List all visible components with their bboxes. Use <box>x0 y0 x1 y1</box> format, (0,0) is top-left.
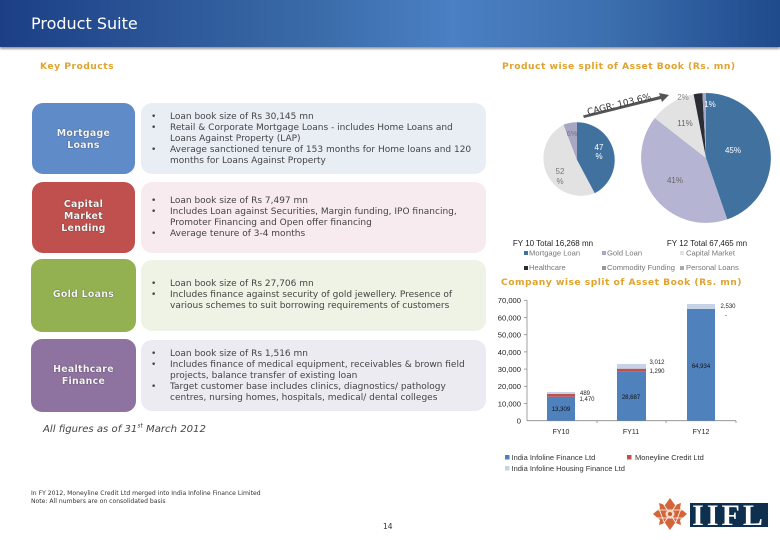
bars: FY11 <box>617 360 665 421</box>
pie: FY10: 52 <box>556 167 565 176</box>
pie legend: Gold Loan <box>607 248 642 258</box>
pie legend: Mortgage Loan <box>529 248 580 258</box>
details: healthcare: Includes finance of medical equipment, receivables & brown field <box>170 360 465 370</box>
y axis labels: 0 <box>517 416 521 426</box>
pie: FY10: 47 <box>595 143 604 152</box>
label box: gold <box>31 259 136 332</box>
panel: healthcare finance <box>31 339 486 412</box>
details: healthcare <box>141 340 486 411</box>
x axis labels: FY10 <box>553 429 569 436</box>
y axis labels: 60,000 <box>498 314 521 322</box>
y axis labels: 10,000 <box>498 400 521 408</box>
bars: FY12: - <box>725 313 727 319</box>
footnote: Note: All numbers are on consolidated basis <box>31 498 166 505</box>
caption: FY12 total: FY 12 Total 67,465 mn <box>667 239 747 248</box>
details: healthcare: projects, balance transfer of existing loan <box>170 371 357 381</box>
label box: capital market <box>32 182 135 253</box>
bars: FY12: 2,530 <box>720 304 736 310</box>
panel: gold loans <box>31 259 486 332</box>
heading: product wise split: Product wise split of Asset Book (Rs. mn) <box>502 61 736 72</box>
bar legend: Moneyline Credit Ltd <box>635 453 704 462</box>
pie legend: Healthcare <box>529 263 566 272</box>
details: mortgage: • <box>151 145 156 155</box>
details: healthcare: • <box>151 360 156 370</box>
bars: FY10 <box>547 391 595 421</box>
details: capital market: • <box>151 196 156 206</box>
bars: FY11: 3,012 <box>649 360 665 366</box>
pie legend: Capital Market <box>686 248 736 258</box>
panel: capital market lending <box>32 182 486 253</box>
label box: healthcare <box>31 339 136 412</box>
page number: 14 <box>383 522 393 531</box>
pie: FY12: 45% <box>725 146 741 155</box>
pie legend: Personal Loans <box>686 263 739 272</box>
pie: FY12: 41% <box>667 176 683 185</box>
pie: FY12: 2% <box>677 93 689 102</box>
bars: FY12: 64,934 <box>692 364 711 370</box>
bars: FY10: 489 <box>580 391 591 397</box>
bars: FY11: 1,290 <box>649 369 665 375</box>
details: gold: Includes finance against security of gold jewellery. Presence of <box>170 290 452 300</box>
pie legend: Commodity Funding <box>607 263 675 272</box>
pie: FY10: 6% <box>567 129 578 138</box>
bar legend: India Infoline Finance Ltd <box>512 453 595 462</box>
details: healthcare: Target customer base includes clinics, diagnostics/ pathology <box>170 382 446 392</box>
footnote <box>31 490 261 505</box>
label box: mortgage: Loans <box>67 140 100 151</box>
y axis labels: 40,000 <box>498 348 521 357</box>
details: gold <box>141 260 486 331</box>
label box: healthcare: Finance <box>62 376 105 387</box>
label box: mortgage <box>32 103 135 174</box>
y axis labels: 30,000 <box>498 365 521 374</box>
details: mortgage: • <box>151 123 156 133</box>
bars: FY10: 13,309 <box>552 407 571 413</box>
caption: FY10 total: FY 10 Total 16,268 mn <box>513 239 593 248</box>
details: mortgage <box>141 103 486 174</box>
label box: mortgage: Mortgage <box>57 128 110 139</box>
arrow: CAGR: CAGR: 103.6% <box>586 92 653 118</box>
x axis labels: FY12 <box>693 429 709 436</box>
header bar <box>0 0 780 47</box>
pie: FY12: 11% <box>677 119 693 128</box>
details: healthcare: • <box>151 349 156 359</box>
bars: FY10: 1,470 <box>579 397 595 403</box>
x axis labels <box>553 429 709 436</box>
details: gold: • <box>151 279 156 289</box>
label box: gold: Gold Loans <box>53 289 114 300</box>
note: as-of date: All figures as of 31st March 2012 <box>43 423 206 435</box>
details: healthcare: • <box>151 382 156 392</box>
footnote: In FY 2012, Moneyline Credit Ltd merged into India Infoline Finance Limited <box>31 490 261 497</box>
details: mortgage: months for Loans Against Property <box>170 156 326 166</box>
details: capital market: Loan book size of Rs 7,497 mn <box>170 196 308 206</box>
details: gold: • <box>151 290 156 300</box>
y axis labels: 50,000 <box>498 330 521 340</box>
pie: FY12: 1% <box>704 100 716 109</box>
icon: star emblem <box>653 498 687 530</box>
details: capital market: Average tenure of 3-4 months <box>170 229 305 239</box>
heading: company wise split: Company wise split of Asset Book (Rs. mn) <box>501 277 742 288</box>
heading: key products: Key Products <box>40 61 114 72</box>
pie legend <box>524 248 739 272</box>
label box: capital market: Capital <box>64 199 103 210</box>
details: gold: various schemes to suit borrowing requirements of customers <box>170 301 449 311</box>
details: capital market: Promoter Financing and Open offer financing <box>170 218 372 228</box>
bar legend <box>505 453 704 473</box>
details: mortgage: • <box>151 112 156 122</box>
pie: FY10: % <box>556 177 564 186</box>
title: Product Suite <box>31 14 138 33</box>
details: gold: Loan book size of Rs 27,706 mn <box>170 279 314 289</box>
details: capital market: • <box>151 207 156 217</box>
pie: FY10 <box>543 122 615 196</box>
details: mortgage: Retail & Corporate Mortgage Loans - includes Home Loans and <box>170 123 453 133</box>
pie: FY12 <box>641 93 771 223</box>
label box: capital market: Market <box>64 211 103 222</box>
details: mortgage: Loans Against Property (LAP) <box>170 134 301 144</box>
details: mortgage: Average sanctioned tenure of 153 months for Home loans and 120 <box>170 145 471 155</box>
logo: IIFL <box>653 498 768 530</box>
details: capital market: • <box>151 229 156 239</box>
bar legend: India Infoline Housing Finance Ltd <box>512 464 625 473</box>
details: capital market: Includes Loan against Securities, Margin funding, IPO financing, <box>170 207 457 217</box>
pie: FY10: % <box>595 152 603 161</box>
pie charts <box>513 92 771 272</box>
label box: capital market: Lending <box>61 223 106 234</box>
bars: FY12 <box>687 304 736 421</box>
panel: mortgage loans <box>32 103 486 174</box>
y axis labels: 70,000 <box>498 296 521 305</box>
y axis labels: 20,000 <box>498 382 521 391</box>
y axis labels <box>498 296 521 426</box>
details: capital market <box>141 182 486 253</box>
details: healthcare: Loan book size of Rs 1,516 mn <box>170 349 308 359</box>
bar chart <box>498 296 736 473</box>
details: mortgage: Loan book size of Rs 30,145 mn <box>170 112 314 122</box>
label box: healthcare: Healthcare <box>53 364 114 375</box>
details: healthcare: centres, nursing homes, hospitals, medical/ dental colleges <box>170 393 437 403</box>
bars: FY11: 28,687 <box>622 395 641 401</box>
x axis labels: FY11 <box>623 429 639 436</box>
